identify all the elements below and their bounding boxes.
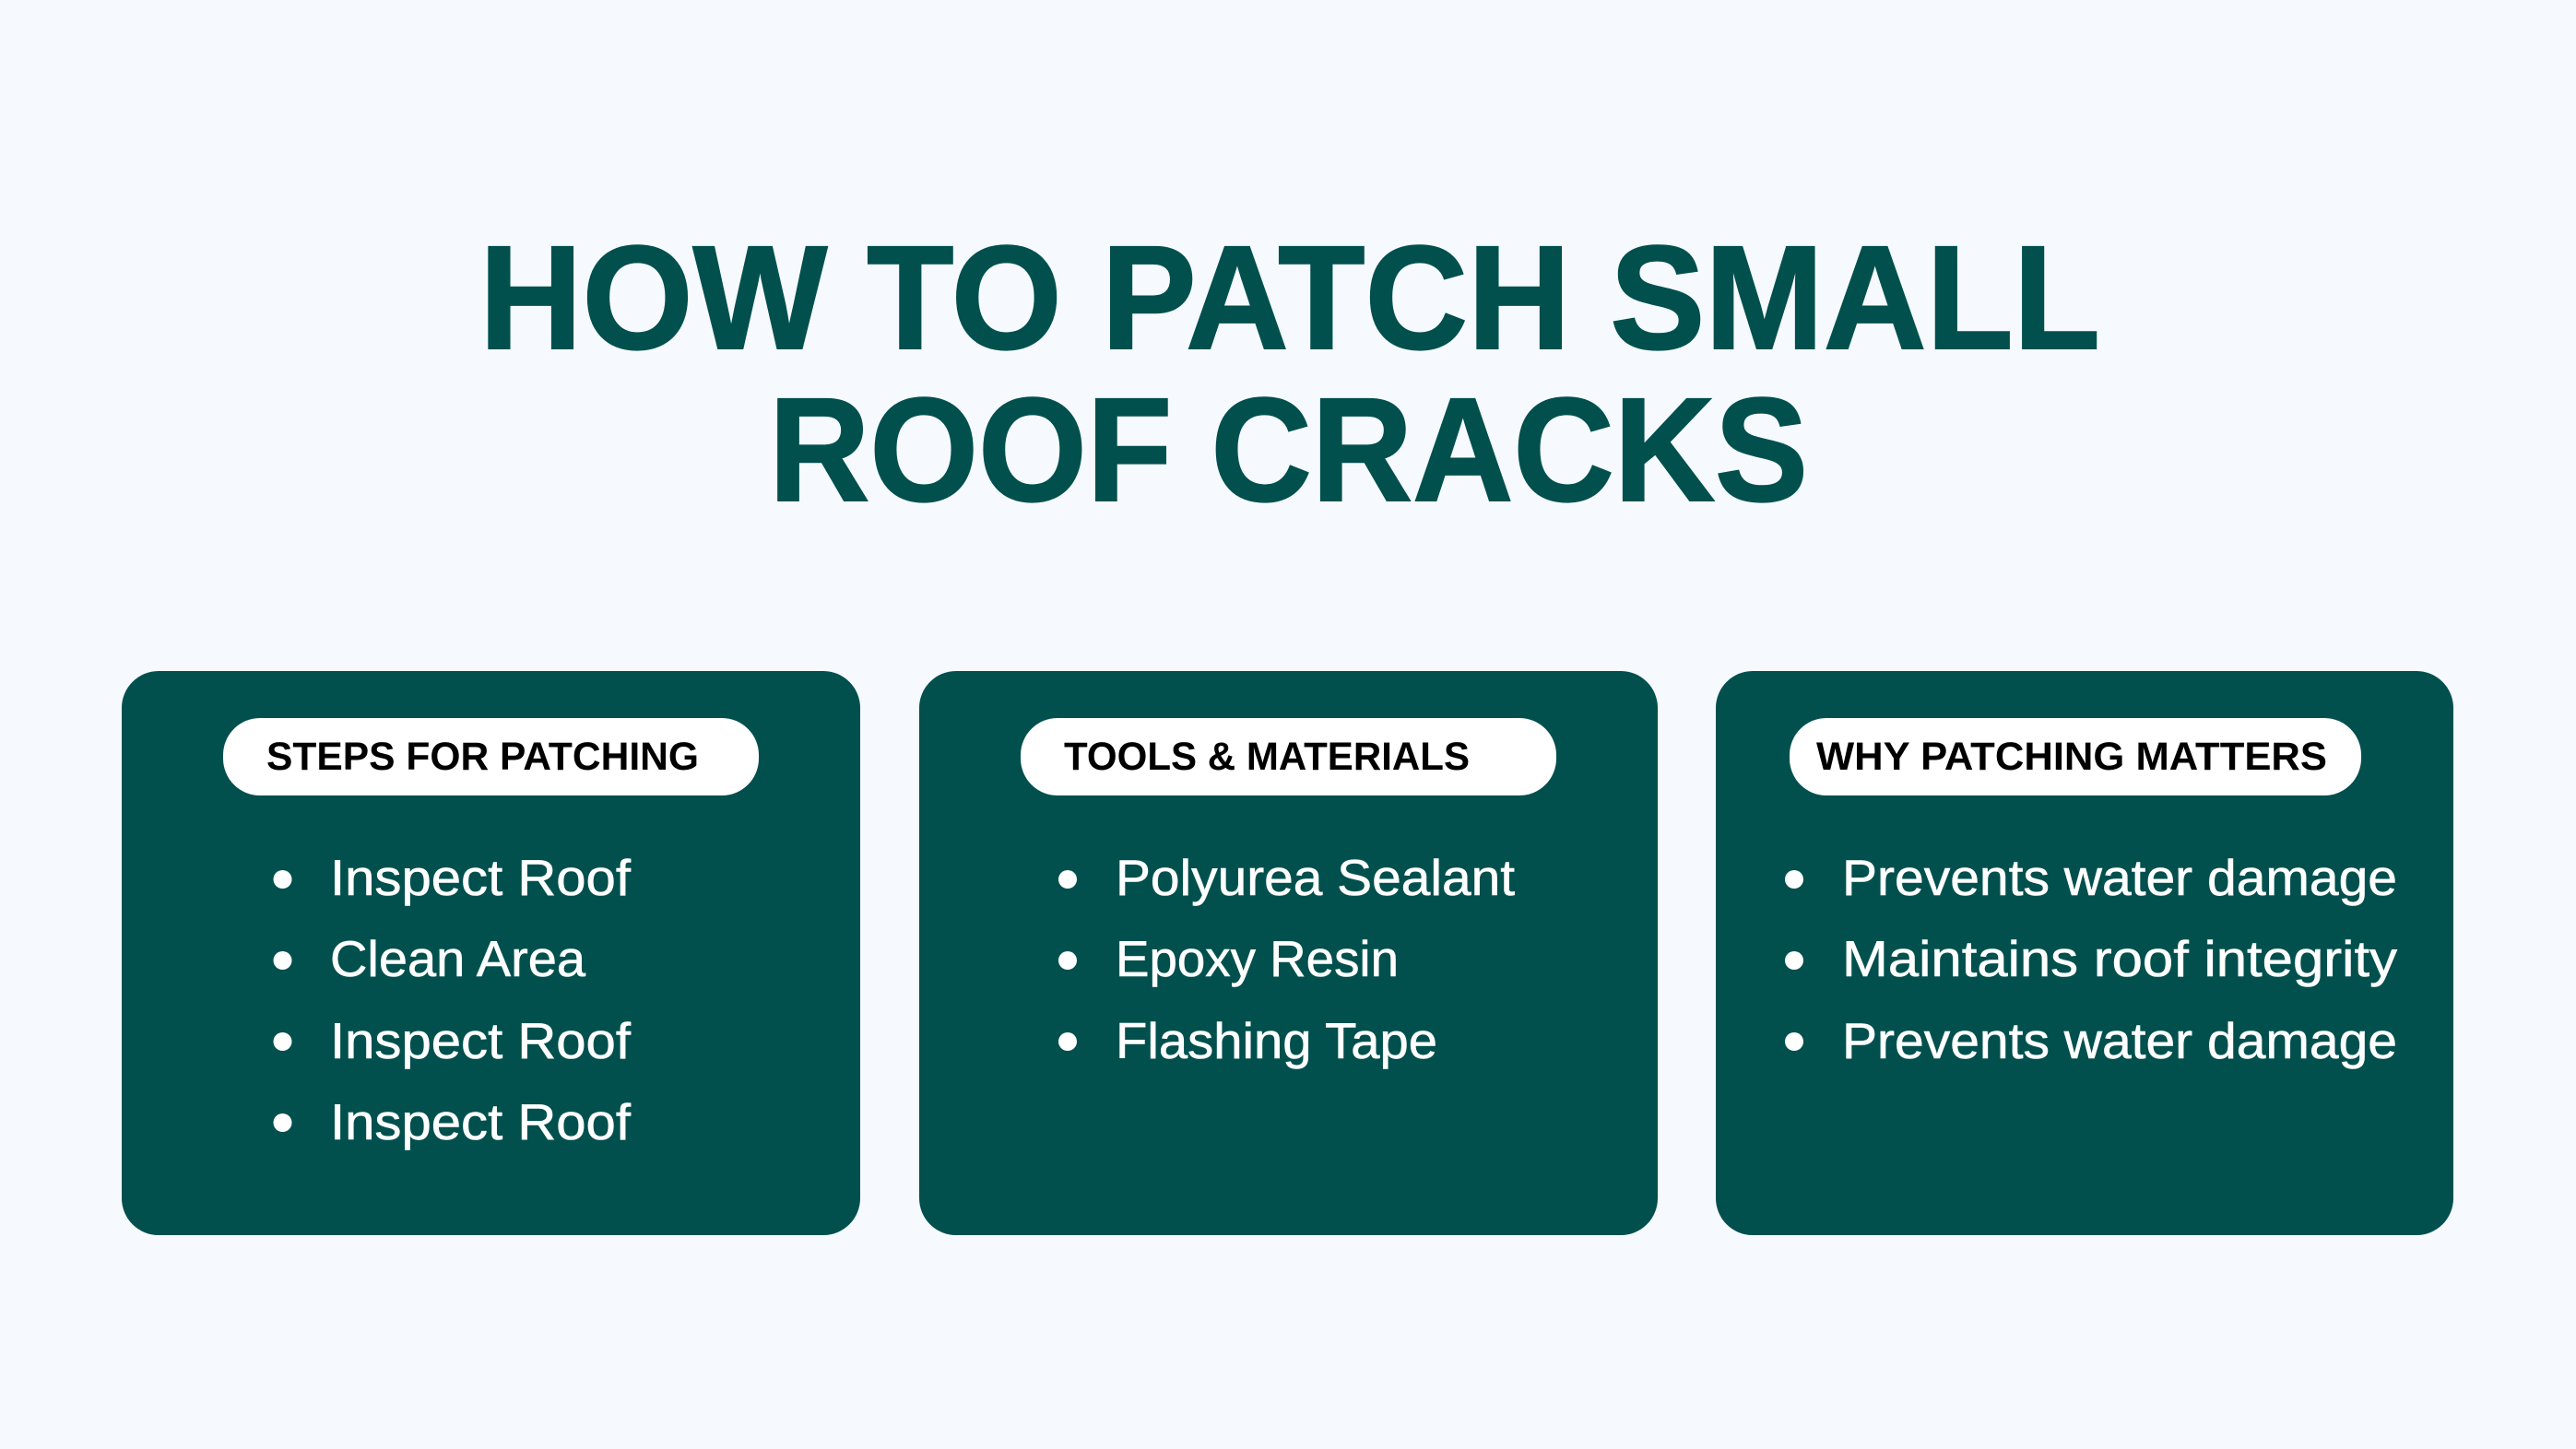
list item: clean area: Clean Area bbox=[330, 930, 585, 987]
list item: inspect roof: Inspect Roof bbox=[330, 1012, 632, 1069]
heading: tools and materials: TOOLS & MATERIALS bbox=[1064, 735, 1470, 779]
list item: inspect roof: Inspect Roof bbox=[330, 1093, 632, 1150]
list item: flashing tape: Flashing Tape bbox=[1116, 1012, 1437, 1069]
list item: epoxy resin: Epoxy Resin bbox=[1116, 930, 1399, 987]
heading: why patching matters: WHY PATCHING MATTERS bbox=[1816, 735, 2327, 779]
heading: why patching matters bbox=[1790, 718, 2361, 795]
list item: inspect roof: Inspect Roof bbox=[330, 849, 632, 906]
heading: steps for patching bbox=[223, 718, 759, 795]
list item: polyurea sealant: Polyurea Sealant bbox=[1116, 849, 1515, 906]
title: ROOF CRACKS bbox=[769, 367, 1808, 532]
heading: steps for patching: STEPS FOR PATCHING bbox=[266, 735, 699, 779]
list item: prevents water damage: Prevents water damage bbox=[1842, 849, 2397, 906]
list item: prevents water damage: Prevents water damage bbox=[1842, 1012, 2397, 1069]
title bbox=[479, 215, 2100, 532]
heading: tools and materials bbox=[1021, 718, 1556, 795]
list item: maintains roof integrity: Maintains roof integrity bbox=[1842, 930, 2398, 987]
title: HOW TO PATCH SMALL bbox=[479, 215, 2100, 380]
panel: why patching matters bbox=[1716, 671, 2453, 1235]
panel: steps for patching bbox=[122, 671, 860, 1235]
panel: tools and materials bbox=[919, 671, 1658, 1235]
